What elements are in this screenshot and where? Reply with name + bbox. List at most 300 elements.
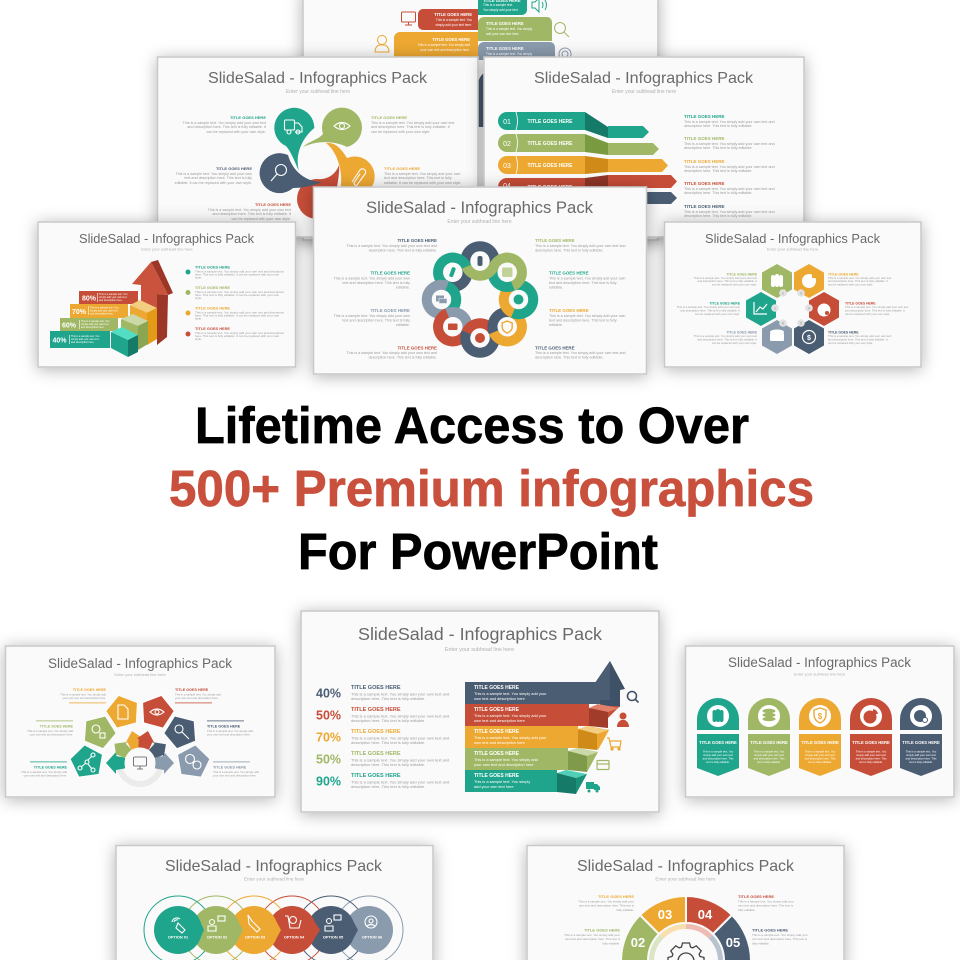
text: right column: This is a sample text. You simply add your own text and xyxy=(535,244,626,248)
text: middle right: text and description here. This text is fully xyxy=(384,176,452,180)
subhead: Enter your subhead line here xyxy=(141,246,193,252)
text: bottom left: This is a sample text. You simply add your own text xyxy=(208,208,291,212)
label bar 80%: and description here. xyxy=(99,299,123,302)
text: left column: TITLE GOES HERE xyxy=(726,330,758,334)
panel: pentagons and arrows slide xyxy=(6,646,275,797)
text: grey label: TITLE GOES HERE xyxy=(213,766,247,770)
subhead: Enter your subhead line here xyxy=(445,647,514,653)
text: left column xyxy=(677,272,758,345)
option 02: OPTION 02 xyxy=(207,934,228,940)
text: teal label xyxy=(21,762,68,778)
text: navy: fully editable. xyxy=(752,942,770,946)
panel: ribbon arrows slide xyxy=(484,57,804,237)
column 3: $ xyxy=(818,712,823,721)
number badges xyxy=(771,289,813,327)
text: yellow label: your own text and description here. xyxy=(62,696,106,700)
text: left column: TITLE GOES HERE xyxy=(726,272,758,276)
number badges: 6 xyxy=(782,320,785,326)
segment 02: 02 xyxy=(631,935,645,950)
list rows: style. xyxy=(195,296,202,300)
bar: navy: This is a sample text. You simply add your xyxy=(474,691,547,696)
outline rings xyxy=(144,896,403,960)
text: left column: TITLE GOES HERE xyxy=(709,302,741,306)
panel: stacked bars with percentages slide xyxy=(301,611,659,812)
text: green xyxy=(564,928,620,946)
text: left column xyxy=(334,238,437,360)
text: navy: This is a sample text. You simply add your xyxy=(752,933,808,937)
bar: green: your own text and description here xyxy=(474,762,533,767)
text: right column: TITLE GOES HERE xyxy=(535,238,575,243)
text: right column xyxy=(535,238,626,360)
text: item 3: This is a sample text. You simply add your own text and xyxy=(684,165,775,169)
hexagon icons xyxy=(754,274,830,344)
subhead: Enter your subhead line here xyxy=(286,89,350,95)
column 5 xyxy=(900,698,942,776)
text: left column: This is a sample text. You simply add your own text xyxy=(694,276,757,280)
text: right column: This is a sample text. You simply add your own text xyxy=(845,305,908,309)
text: item 2: description here. This text is fully editable. xyxy=(684,146,752,150)
icon: search xyxy=(628,692,638,702)
text: yellow: This is a sample text. You simply add your xyxy=(578,900,634,904)
bar: green: This is a sample text. You simply add xyxy=(474,757,538,762)
text: teal label: This is a sample text. You simply add xyxy=(21,770,67,774)
icon: person xyxy=(375,36,389,52)
teal step xyxy=(111,327,138,357)
text: left column: can be replaced with your own style. xyxy=(712,282,757,286)
text: navy label: TITLE GOES HERE xyxy=(207,724,241,728)
panel: shield columns slide xyxy=(686,646,954,797)
text: navy label: This is a sample text. You simply add xyxy=(207,729,253,733)
text: item 4: description here. This text is fully editable. xyxy=(684,191,752,195)
text: item 5 xyxy=(684,204,775,218)
column 1: and description here. This xyxy=(703,756,734,760)
column 2: simply add your own text xyxy=(754,753,784,757)
arrow 01: 01 xyxy=(503,119,511,126)
left text rows: TITLE GOES HERE xyxy=(351,773,401,779)
label bar 60%: This is a sample text. You xyxy=(81,320,110,323)
hexagon icons: $ xyxy=(807,335,811,342)
number badges: 3 xyxy=(800,290,803,296)
text: right column: TITLE GOES HERE xyxy=(845,302,876,306)
option 02 xyxy=(192,906,243,954)
arrow 02: 02 xyxy=(503,141,511,148)
title: SlideSalad - Infographics Pack xyxy=(48,656,232,671)
panel: woven ribbon flower slide xyxy=(314,187,646,374)
gear of arrows xyxy=(106,729,174,784)
bar: yellow xyxy=(465,726,578,748)
heading line 1: Lifetime Access to Over xyxy=(195,397,749,454)
text: green label xyxy=(27,720,74,736)
left text rows: description here. This text is fully editable. xyxy=(351,696,425,701)
text: right column: can be replaced with your own style. xyxy=(845,312,890,316)
text: top left xyxy=(183,115,266,134)
text: left column: editable. xyxy=(396,286,410,290)
subhead: Enter your subhead line here xyxy=(655,876,716,882)
bar: red: This is a sample text. You simply add your xyxy=(474,713,547,718)
subhead: Enter your subhead line here xyxy=(794,672,846,676)
text: item 1: TITLE GOES HERE xyxy=(684,114,725,119)
icon: magnifier xyxy=(554,22,569,37)
text: item 3 xyxy=(684,159,775,173)
label bar 80% xyxy=(79,291,138,304)
ribbon icons xyxy=(436,256,524,343)
text: right column: and description here. This text is fully editable. It xyxy=(828,279,888,283)
text: top right: can be replaced with your own style. xyxy=(371,130,430,134)
left text rows: TITLE GOES HERE xyxy=(351,751,401,757)
text: red: fully editable. xyxy=(738,908,756,912)
text: left column: can be replaced with your own style. xyxy=(695,312,740,316)
title: SlideSalad - Infographics Pack xyxy=(728,655,911,670)
text: bottom left: TITLE GOES HERE xyxy=(255,202,291,207)
bar: yellow: This is a sample text. You simply add your xyxy=(474,735,547,740)
text: middle right: This is a sample text. You simply add your own xyxy=(384,172,460,176)
column 2: TITLE GOES HERE xyxy=(750,740,788,745)
text: left column: This is a sample text. You simply add your own xyxy=(334,276,410,280)
segment 02 xyxy=(621,915,659,960)
text: teal label: your own text and description here. xyxy=(23,774,67,778)
text: right column: TITLE GOES HERE xyxy=(535,346,575,350)
text: right column: editable. xyxy=(549,286,563,290)
segment 05: 05 xyxy=(726,935,740,950)
option 06 xyxy=(345,906,393,954)
text: top left: TITLE GOES HERE xyxy=(230,115,266,120)
text: red: own text and description here. This text is xyxy=(738,904,794,908)
text: yellow label: TITLE GOES HERE xyxy=(73,688,107,692)
column 1 xyxy=(697,698,739,776)
text: navy label xyxy=(207,720,253,736)
label bar 60%: simply add your own text xyxy=(81,323,109,326)
bar: navy: own text and description here xyxy=(474,696,525,701)
segment 04 xyxy=(686,896,732,934)
teal bubble: This is a sample text. xyxy=(483,3,513,7)
percentages: 40% xyxy=(316,686,341,700)
left text rows: This is a sample text. You simply add your own text and xyxy=(351,714,449,718)
icon: truck xyxy=(586,782,600,792)
left text rows: This is a sample text. You simply add your own text and xyxy=(351,736,449,740)
panel: five-blade whirl slide xyxy=(158,57,478,237)
text: top left: can be replaced with your own style. xyxy=(207,130,266,134)
blade: yellow xyxy=(326,143,375,196)
blade: red xyxy=(297,165,339,219)
text: right column: text and description here. This text is fully xyxy=(549,281,617,285)
text: top right: and description here. This text is fully editable. It xyxy=(371,125,450,129)
column 5: and description here. This xyxy=(906,756,937,760)
green bubble: TITLE GOES HERE xyxy=(486,21,524,26)
column 4: This is a sample text. You xyxy=(856,750,887,754)
text: middle right: editable. It can be replaced with your own style. xyxy=(384,181,461,185)
text: bottom left: and description here. This text is fully editable. It xyxy=(212,212,291,216)
grey bubble: TITLE GOES HERE xyxy=(486,46,524,51)
bar: red: own text and description here xyxy=(474,718,525,723)
text: right column: and description here. This text is fully editable. It xyxy=(845,308,905,312)
pentagon icons xyxy=(78,705,201,772)
number badges: 2 xyxy=(782,290,785,296)
bar: teal: TITLE GOES HERE xyxy=(474,773,520,779)
text: right column: This is a sample text. You simply add your own text xyxy=(828,334,891,338)
arrow 04 xyxy=(498,175,677,196)
yellow bubble: your own text and description here. xyxy=(420,48,470,52)
bar: navy: TITLE GOES HERE xyxy=(474,685,520,691)
text: yellow label xyxy=(60,688,107,703)
text: item 5: TITLE GOES HERE xyxy=(684,204,725,209)
grey bubble: This is a sample text. You simply xyxy=(486,52,532,56)
label bar 40% xyxy=(50,331,110,348)
option 06: OPTION 06 xyxy=(362,934,383,940)
list rows: TITLE GOES HERE xyxy=(195,285,230,290)
left text rows: This is a sample text. You simply add your own text and xyxy=(351,692,449,696)
panel: hexagon ring slide xyxy=(664,222,921,367)
left text rows: description here. This text is fully editable. xyxy=(351,718,425,723)
text: left column: description here. This text is fully editable. xyxy=(369,248,437,252)
option 05: OPTION 05 xyxy=(323,934,344,940)
subhead: Enter your subhead line here xyxy=(244,876,304,882)
arrow 04: TITLE GOES HERE xyxy=(527,185,573,191)
column 4: simply add your own text xyxy=(856,753,886,757)
column 1: TITLE GOES HERE xyxy=(699,740,737,745)
option 03 xyxy=(230,906,281,954)
left text rows: TITLE GOES HERE xyxy=(351,685,401,691)
text: yellow label: This is a sample text. You simply add xyxy=(60,692,106,696)
title: SlideSalad - Infographics Pack xyxy=(534,70,754,87)
icon: cart xyxy=(607,738,621,750)
column 5: This is a sample text. You xyxy=(906,750,937,754)
yellow step xyxy=(130,300,157,345)
label bar 70%: This is a sample text. You xyxy=(90,306,119,310)
segment 03: 03 xyxy=(658,907,672,922)
segment 05 xyxy=(713,915,751,960)
bar: navy xyxy=(465,682,600,704)
blade: navy xyxy=(260,153,322,193)
text: item 1: This is a sample text. You simply add your own text and xyxy=(684,120,775,124)
text: item 5: This is a sample text. You simply add your own text and xyxy=(684,210,775,214)
text: middle left: text and description here. This text is fully xyxy=(184,176,252,180)
teal bubble xyxy=(478,0,527,15)
icon: eye xyxy=(334,122,350,130)
panel: option circles slide xyxy=(116,846,433,960)
text: left column: editable. xyxy=(396,323,410,327)
column 2: This is a sample text. You xyxy=(754,750,785,754)
label bar 80%: 80% xyxy=(82,296,97,302)
grey bubble xyxy=(478,42,555,60)
text: left column: description here. This text is fully editable. xyxy=(369,356,437,360)
panel: 3D staircase arrow slide xyxy=(38,222,296,367)
text: red: This is a sample text. You simply add your xyxy=(738,900,794,904)
text: left column: This is a sample text. You simply add your own text and xyxy=(346,351,437,355)
subhead: Enter your subhead line here xyxy=(447,219,512,225)
text: right column: description here. This text is fully editable. xyxy=(535,356,603,360)
text: navy: TITLE GOES HERE xyxy=(752,928,788,932)
list rows xyxy=(186,264,284,341)
subhead: Enter your subhead line here xyxy=(114,672,166,677)
text: navy: own text and description here. This text is xyxy=(752,937,808,941)
text: left column: and description here. This text is fully editable. It xyxy=(680,308,740,312)
arrow 03: TITLE GOES HERE xyxy=(527,163,573,169)
number badges: 5 xyxy=(800,320,803,326)
list rows: here. This text is fully editable. It can be replaced with your own xyxy=(195,334,279,338)
label bar 40%: simply add your own text xyxy=(71,338,99,341)
icon: target xyxy=(559,48,571,60)
text: teal label: TITLE GOES HERE xyxy=(34,766,68,770)
text: green label: This is a sample text. You simply add xyxy=(27,729,73,733)
text: left column: text and description here. This text is fully xyxy=(342,318,410,322)
column 5: TITLE GOES HERE xyxy=(902,740,940,745)
text: left column: TITLE GOES HERE xyxy=(397,238,437,243)
text: item 1: description here. This text is fully editable. xyxy=(684,124,752,128)
column 3: TITLE GOES HERE xyxy=(801,740,839,745)
3D steps xyxy=(557,704,620,794)
column 3: simply add your own text xyxy=(805,753,835,757)
label bar 60% xyxy=(60,318,118,331)
text: right column: text and description here. This text is fully xyxy=(549,318,617,322)
hexagons xyxy=(746,264,839,354)
percentages: 50% xyxy=(316,752,341,766)
red bubble xyxy=(418,9,478,30)
title: SlideSalad - Infographics Pack xyxy=(208,70,428,87)
blade: green xyxy=(303,108,362,147)
column 5: text is fully editable. xyxy=(909,760,933,764)
green bubble: add your own text here. xyxy=(486,32,519,36)
yellow bubble xyxy=(394,32,478,57)
left text rows: TITLE GOES HERE xyxy=(351,729,401,735)
option 04 xyxy=(268,906,320,954)
bar: teal: This is a sample text. You simply xyxy=(474,779,530,784)
icon: card xyxy=(597,760,609,770)
bar: yellow: TITLE GOES HERE xyxy=(474,729,520,735)
label bar 70%: 70% xyxy=(72,309,87,316)
navy arrow xyxy=(595,661,625,707)
text: right column: This is a sample text. You simply add your own xyxy=(549,276,625,280)
column 3: This is a sample text. You xyxy=(805,750,836,754)
text: middle right: TITLE GOES HERE xyxy=(384,166,420,171)
option 05 xyxy=(307,906,358,954)
list rows: style. xyxy=(195,276,202,280)
woven ribbon xyxy=(427,246,533,353)
title: SlideSalad - Infographics Pack xyxy=(358,624,602,644)
column 3: and description here. This xyxy=(805,756,836,760)
text: right column: TITLE GOES HERE xyxy=(549,270,589,276)
yellow bubble: This is a sample text. You simply add xyxy=(418,43,470,47)
red bubble: TITLE GOES HERE xyxy=(434,12,472,17)
title: SlideSalad - Infographics Pack xyxy=(705,231,881,246)
text: right column: TITLE GOES HERE xyxy=(828,272,859,276)
column 5: simply add your own text xyxy=(906,753,936,757)
segment 04: 04 xyxy=(698,907,713,922)
icon: paperclip xyxy=(352,169,366,185)
text: grey label: This is a sample text. You simply add xyxy=(213,770,259,774)
column 2: text is fully editable. xyxy=(757,760,781,764)
left text rows xyxy=(351,685,449,789)
title: SlideSalad - Infographics Pack xyxy=(366,198,594,217)
column 1: text is fully editable. xyxy=(706,760,730,764)
text: item 2: TITLE GOES HERE xyxy=(684,136,725,141)
list rows: This is a sample text. You simply add your own text and description xyxy=(195,270,284,274)
text: bottom left xyxy=(208,202,291,221)
list rows: TITLE GOES HERE xyxy=(195,264,230,270)
bar: red: TITLE GOES HERE xyxy=(474,707,520,713)
text: red: TITLE GOES HERE xyxy=(738,894,774,899)
option 03: OPTION 03 xyxy=(245,934,266,940)
left text rows: description here. This text is fully editable. xyxy=(351,740,425,745)
panel: top rounded bubbles slide xyxy=(303,0,658,240)
inner pale band xyxy=(650,926,722,960)
label bar 70%: and description here. xyxy=(90,312,114,316)
text: item 2: This is a sample text. You simply add your own text and xyxy=(684,142,775,146)
column 4: text is fully editable. xyxy=(859,760,883,764)
main heading xyxy=(169,397,814,580)
text: navy xyxy=(752,928,808,946)
pentagons xyxy=(67,691,213,780)
arrow 02: TITLE GOES HERE xyxy=(527,141,573,147)
column 4: and description here. This xyxy=(856,756,887,760)
green bubble xyxy=(478,17,552,41)
text: navy label: your own text and description here. xyxy=(207,732,251,736)
text: middle left: This is a sample text. You simply add your own xyxy=(176,172,252,176)
left text rows: description here. This text is fully editable. xyxy=(351,762,425,767)
text: red label xyxy=(175,688,221,703)
bar: green xyxy=(465,748,568,770)
text: middle left: editable. It can be replaced with your own style. xyxy=(175,181,252,185)
text: green label: TITLE GOES HERE xyxy=(40,724,74,728)
text: top left: and description here. This text is fully editable. It xyxy=(187,125,266,129)
text: item 3: TITLE GOES HERE xyxy=(684,159,725,164)
text: top right: TITLE GOES HERE xyxy=(371,115,407,120)
text: left column: and description here. This text is fully editable. It xyxy=(697,279,757,283)
list rows: This is a sample text. You simply add your own text and description xyxy=(195,290,284,294)
bar: red xyxy=(465,704,589,726)
text: item 2 xyxy=(684,136,775,150)
text: item 5: description here. This text is fully editable. xyxy=(684,214,752,218)
list rows: This is a sample text. You simply add your own text and description xyxy=(195,331,284,335)
icon: gear xyxy=(668,943,704,960)
text: item 3: description here. This text is fully editable. xyxy=(684,169,752,173)
text: red label: This is a sample text. You simply add xyxy=(175,692,221,696)
arrow 03: 03 xyxy=(503,163,511,170)
text: item 4: TITLE GOES HERE xyxy=(684,181,725,186)
column 3: text is fully editable. xyxy=(808,760,832,764)
arrow 01 xyxy=(498,112,649,138)
label bar 60%: and description here. xyxy=(81,326,105,329)
label bar 40%: This is a sample text. You xyxy=(71,335,100,338)
left text rows: This is a sample text. You simply add your own text and xyxy=(351,758,449,762)
text: middle right xyxy=(384,166,461,185)
red bubble: This is a sample text. You xyxy=(436,18,472,22)
text: green: fully editable. xyxy=(602,942,620,946)
column 1: This is a sample text. You xyxy=(703,750,734,754)
text: yellow: TITLE GOES HERE xyxy=(598,894,634,899)
icon: truck xyxy=(284,120,302,134)
text: right column: TITLE GOES HERE xyxy=(828,330,859,334)
heading line 2: 500+ Premium infographics xyxy=(169,460,814,517)
label bar 80%: This is a sample text. You xyxy=(99,293,128,296)
green bubble: This is a sample text. You simply xyxy=(486,27,532,31)
text: left column: TITLE GOES HERE xyxy=(370,270,410,276)
text: red label: your own text and description here. xyxy=(175,696,219,700)
text: left column: can be replaced with your own style. xyxy=(712,341,757,345)
text: right column: TITLE GOES HERE xyxy=(549,308,589,313)
label bar 40%: 40% xyxy=(52,338,67,344)
text: left column: TITLE GOES HERE xyxy=(370,308,410,313)
text: right column: This is a sample text. You simply add your own xyxy=(549,314,625,318)
text: red label: TITLE GOES HERE xyxy=(175,688,209,692)
title: SlideSalad - Infographics Pack xyxy=(165,858,382,875)
option 01: OPTION 01 xyxy=(168,934,189,940)
text: red xyxy=(738,894,794,912)
green step xyxy=(121,314,148,350)
text: middle left xyxy=(175,166,252,185)
text: middle left: TITLE GOES HERE xyxy=(216,166,252,171)
option 01 xyxy=(154,906,204,954)
label bar 60%: 60% xyxy=(62,322,77,330)
